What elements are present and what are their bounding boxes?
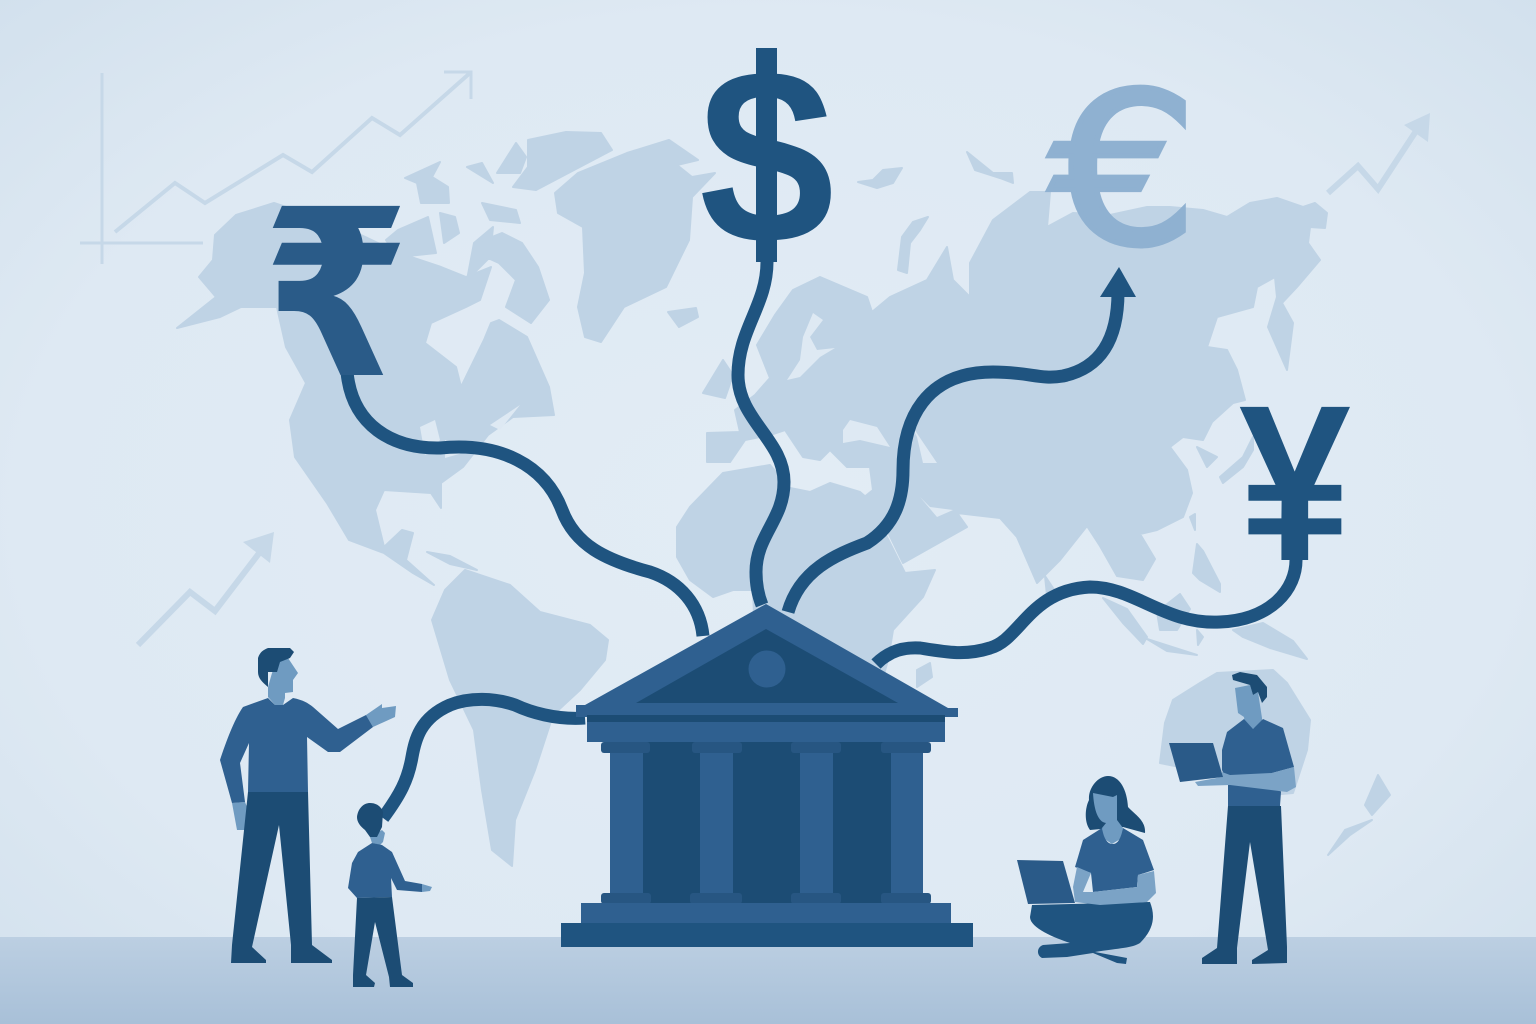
Britain	[703, 360, 733, 398]
flow to child	[383, 699, 585, 818]
man 2: shirt	[1222, 719, 1294, 806]
Eurasia	[707, 192, 1327, 583]
rupee symbol: ₹	[262, 160, 411, 430]
world map	[177, 132, 1390, 866]
floor	[0, 937, 1536, 1024]
child: shirt	[348, 843, 422, 898]
New Zealand	[1328, 775, 1390, 855]
pediment	[636, 629, 898, 703]
man: sweater	[220, 698, 373, 803]
North America	[177, 203, 554, 585]
yen symbol: ¥	[1239, 359, 1351, 607]
lower step	[561, 923, 973, 947]
man 2: arm	[1195, 767, 1296, 792]
woman: arm	[1073, 867, 1156, 905]
man: hair	[258, 648, 294, 687]
man 2: laptop	[1169, 743, 1223, 782]
pediment medallion	[748, 650, 786, 688]
Sri Lanka	[1045, 576, 1055, 595]
euro symbol: €	[1049, 48, 1199, 293]
man: trousers and shoes	[231, 792, 332, 963]
flow to rupee	[347, 372, 703, 636]
Russian arctic islands	[898, 152, 1013, 273]
man 2: hair	[1232, 672, 1267, 703]
child: face	[370, 830, 385, 845]
woman sitting with laptop	[1017, 776, 1156, 964]
Australia	[1160, 670, 1310, 795]
child: trousers and shoes	[353, 897, 413, 987]
inland seas and lakes	[420, 313, 953, 517]
woman: laptop	[1017, 860, 1075, 904]
cornice shadow	[587, 715, 945, 722]
Canadian arctic islands	[386, 132, 612, 323]
woman: legs	[1030, 902, 1153, 964]
trend arrow: top right	[1328, 113, 1430, 193]
woman: face and neck	[1093, 793, 1123, 844]
child: hair	[357, 803, 383, 837]
child	[348, 803, 432, 987]
Caribbean islands	[427, 552, 477, 570]
euro arrowhead	[1100, 267, 1136, 297]
central bank building	[576, 604, 958, 904]
child: hand	[422, 884, 432, 892]
flow to yen	[876, 558, 1296, 664]
man standing with laptop	[1169, 672, 1296, 964]
flow to dollar	[738, 262, 784, 605]
Greenland	[555, 140, 715, 342]
trend chart: top left	[80, 72, 471, 264]
dollar symbol: $	[699, 18, 834, 297]
Svalbard	[858, 168, 902, 188]
trend arrow: lower left	[138, 532, 274, 645]
man: neck and face	[268, 658, 298, 705]
columns	[610, 753, 923, 893]
flow lines from the bank	[347, 262, 1296, 818]
bank steps	[561, 903, 973, 947]
man 2: face and neck	[1235, 685, 1262, 729]
man standing and pointing	[220, 648, 396, 963]
flow to euro	[788, 292, 1118, 612]
upper step	[581, 903, 951, 923]
Madagascar	[917, 663, 932, 687]
South America	[432, 570, 608, 866]
woman: hair	[1086, 776, 1145, 833]
roof	[576, 604, 958, 717]
Korea and Japan	[1197, 437, 1253, 483]
column capitals	[601, 742, 931, 753]
Africa	[677, 465, 935, 760]
Iceland	[668, 308, 698, 327]
man: hands	[232, 704, 396, 830]
Indonesia and New Guinea	[1103, 594, 1307, 659]
entablature	[587, 722, 945, 742]
interior	[610, 742, 892, 904]
column bases	[601, 893, 931, 904]
Taiwan and Philippines	[1190, 514, 1220, 592]
man 2: trousers and shoes	[1202, 806, 1287, 964]
woman: shirt	[1075, 828, 1154, 892]
